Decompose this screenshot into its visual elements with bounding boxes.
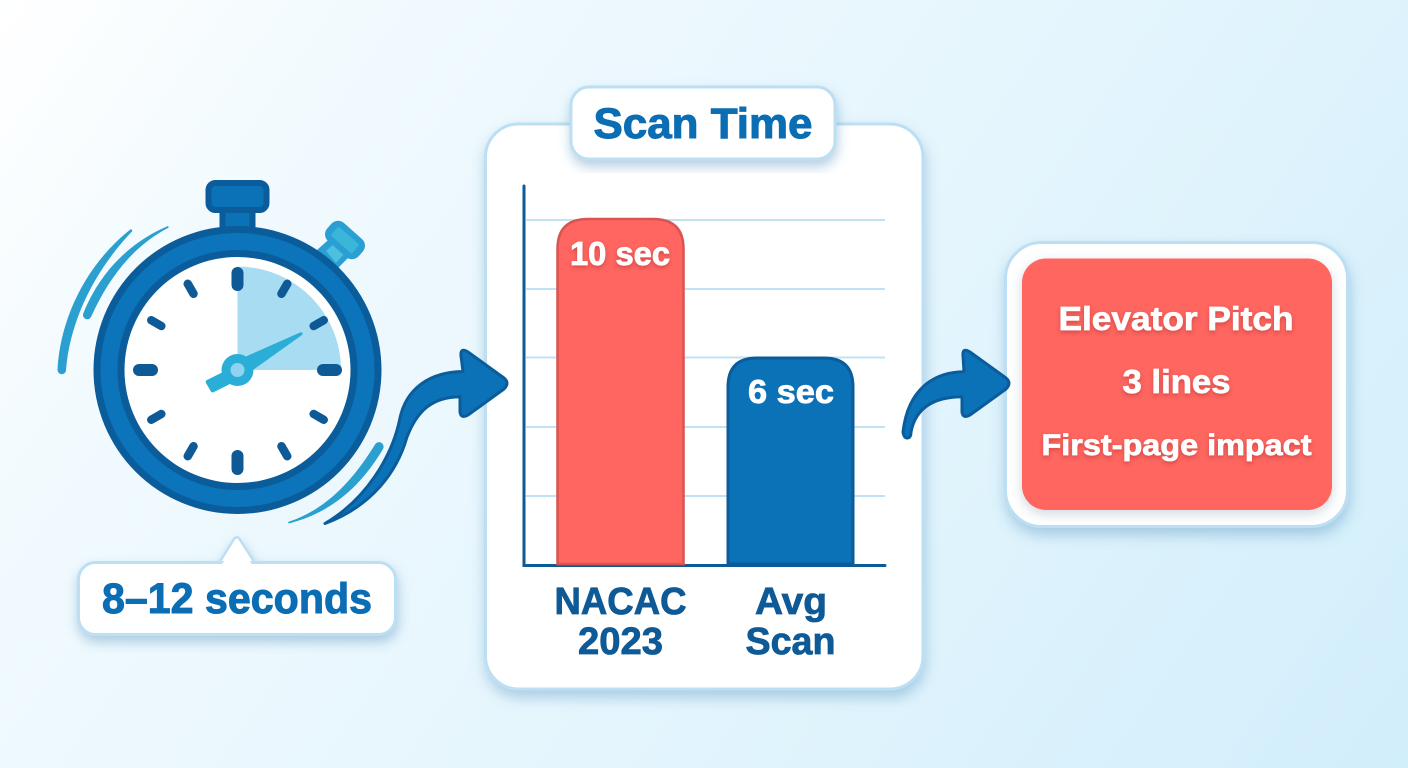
label: Avg Scan: Scan <box>746 621 836 663</box>
label: Avg Scan <box>746 581 836 663</box>
highlighted sector <box>238 266 341 370</box>
bar: NACAC 2023 <box>558 219 684 564</box>
label: NACAC 2023: 2023 <box>578 621 663 663</box>
panel: elevator pitch <box>1006 242 1348 526</box>
bar: NACAC 2023: 10 sec <box>570 235 670 272</box>
bar: Avg Scan <box>728 358 853 564</box>
label: Avg Scan: Avg <box>755 581 827 623</box>
crown <box>208 183 266 232</box>
chart heading: Scan Time <box>594 100 812 148</box>
arrow: stopwatch to chart <box>325 350 507 524</box>
callout: 8-12 seconds: 8–12 seconds <box>102 575 372 623</box>
label: NACAC 2023: NACAC <box>554 581 686 623</box>
panel: scan time chart <box>486 87 923 689</box>
line count: 3 lines <box>1122 363 1230 400</box>
label: NACAC 2023 <box>554 581 686 663</box>
arrow: chart to pitch <box>903 350 1009 438</box>
stopwatch <box>58 183 384 524</box>
hands <box>206 332 303 392</box>
side button <box>317 217 369 270</box>
bar chart axes <box>524 186 885 566</box>
watch body <box>94 226 382 514</box>
motion lines <box>58 226 384 524</box>
callout: 8-12 seconds <box>78 537 396 634</box>
bar: Avg Scan: 6 sec <box>748 373 834 410</box>
heading: Elevator Pitch <box>1058 300 1294 337</box>
chart heading <box>571 87 835 159</box>
ticks <box>139 273 336 469</box>
impact: First-page impact <box>1042 429 1312 462</box>
